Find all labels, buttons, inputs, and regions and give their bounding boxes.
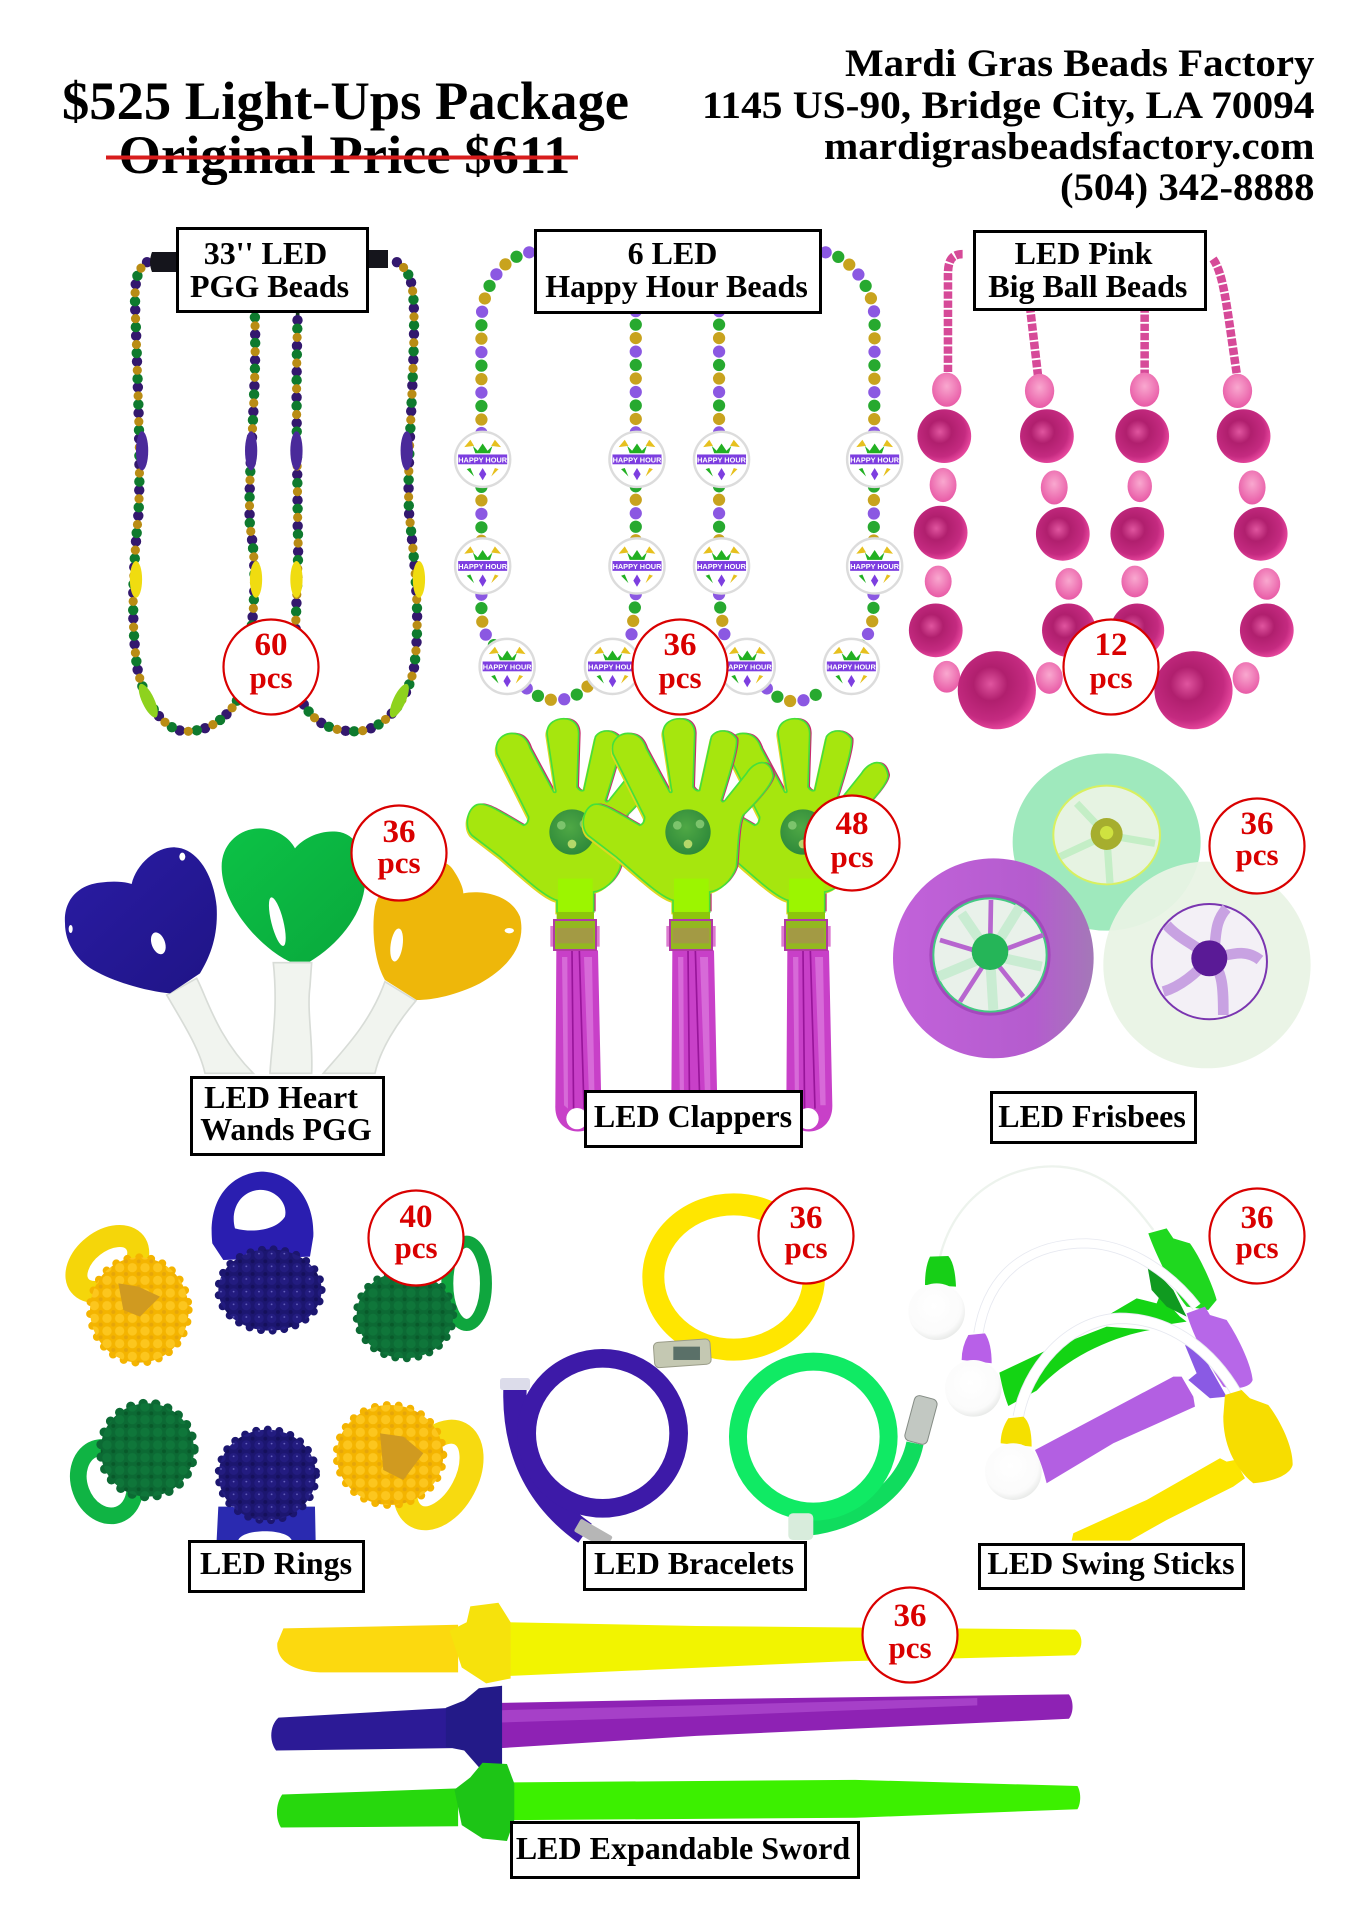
heart: purple — [65, 847, 217, 993]
swing stick: green — [908, 1166, 1217, 1406]
bracelets — [500, 1204, 938, 1549]
panel: LED clappers — [466, 718, 900, 1146]
medallions: Happy Hour: HAPPY HOUR — [827, 662, 876, 671]
sword: green — [277, 1763, 1080, 1841]
bracelet: green — [738, 1362, 938, 1540]
swing stick: yellow — [985, 1318, 1293, 1541]
rings — [66, 1172, 486, 1540]
company contact block: mardigrasbeadsfactory.com — [824, 125, 1314, 168]
badge: 36 pcs: 36 — [664, 627, 696, 663]
panel: 6 LED Happy Hour beads — [455, 230, 902, 714]
badge: 36 pcs: 36 — [382, 814, 416, 850]
title block: Original Price $611 — [118, 125, 570, 185]
badge: 48 pcs: 48 — [836, 806, 868, 842]
frisbee: purple — [893, 858, 1094, 1058]
ring: purple bottom — [217, 1430, 316, 1540]
badge: 36 pcs — [1210, 798, 1304, 894]
sword: yellow — [277, 1603, 1081, 1683]
clasp — [150, 250, 388, 272]
badge: 36 pcs: pcs — [377, 845, 421, 880]
badge: 36 pcs: pcs — [1235, 1230, 1279, 1265]
medallions: Happy Hour: HAPPY HOUR — [850, 562, 900, 571]
label: Wands PGG — [200, 1111, 372, 1147]
company contact block: (504) 342-8888 — [1060, 166, 1314, 209]
label: LED Clappers — [594, 1098, 792, 1134]
label — [974, 232, 1206, 310]
ring: yellow bottom — [337, 1405, 485, 1529]
necklace: pink big balls — [909, 254, 1294, 729]
panel: LED Pink Big Ball beads — [909, 232, 1294, 729]
label — [512, 1822, 858, 1878]
label — [192, 1078, 384, 1154]
label: PGG Beads — [190, 268, 349, 304]
panel: LED expandable sword — [271, 1588, 1081, 1878]
badge: 36 pcs — [1210, 1188, 1304, 1284]
title block — [62, 71, 629, 185]
medallions: Happy Hour: HAPPY HOUR — [483, 662, 532, 671]
ring: green top — [357, 1242, 486, 1358]
medallions: Happy Hour: HAPPY HOUR — [850, 455, 900, 464]
swing stick: purple — [945, 1243, 1253, 1483]
panel: LED rings — [66, 1172, 486, 1592]
label: 33'' LED — [204, 235, 327, 271]
badge: 60 pcs — [224, 620, 318, 714]
wand stems — [167, 963, 416, 1073]
heart: gold — [373, 862, 521, 1000]
label: 6 LED — [628, 235, 717, 271]
badge: 60 pcs: pcs — [249, 660, 293, 695]
medallions: Happy Hour: HAPPY HOUR — [613, 562, 662, 571]
label: LED Bracelets — [594, 1545, 794, 1581]
badge: 36 pcs — [352, 806, 446, 900]
panel: LED swing sticks — [908, 1166, 1304, 1588]
badge: 40 pcs: pcs — [394, 1230, 438, 1265]
bead accents — [130, 431, 425, 720]
label: LED Expandable Sword — [516, 1830, 850, 1866]
badge: 36 pcs: pcs — [658, 660, 702, 695]
medallions: Happy Hour: HAPPY HOUR — [697, 562, 747, 571]
hearts and stems — [65, 828, 521, 1073]
badge: 36 pcs: pcs — [888, 1630, 932, 1665]
label: LED Pink — [1015, 235, 1153, 271]
badge: 36 pcs — [758, 1188, 854, 1284]
label: LED Frisbees — [998, 1098, 1186, 1134]
ring: green bottom — [69, 1403, 194, 1524]
frisbee: mint — [1013, 753, 1201, 931]
medallions: Happy Hour: HAPPY HOUR — [458, 562, 508, 571]
badge: 36 pcs: pcs — [1235, 837, 1279, 872]
panel: LED heart wands — [65, 806, 521, 1154]
badge: 40 pcs — [368, 1190, 464, 1286]
badge: 36 pcs: pcs — [784, 1230, 828, 1265]
badge: 48 pcs — [804, 796, 900, 890]
badge: 12 pcs — [1064, 620, 1158, 714]
medallions: Happy Hour: HAPPY HOUR — [723, 662, 772, 671]
bracelet: yellow — [653, 1204, 814, 1368]
label: Big Ball Beads — [988, 268, 1187, 304]
badge: 36 pcs: 36 — [790, 1200, 822, 1236]
label — [586, 1092, 802, 1146]
badge: 36 pcs: 36 — [1240, 1200, 1274, 1236]
company contact block — [702, 42, 1315, 209]
label — [190, 1542, 364, 1592]
badge: 36 pcs — [862, 1588, 958, 1682]
panel: 33 inch LED PGG beads — [130, 228, 425, 731]
badge: 60 pcs: 60 — [254, 627, 288, 663]
medallions: Happy Hour: HAPPY HOUR — [613, 455, 662, 464]
label: Happy Hour Beads — [545, 268, 808, 304]
label: LED Heart — [204, 1079, 358, 1115]
panel: LED frisbees — [893, 753, 1311, 1142]
swing sticks — [908, 1166, 1293, 1541]
company contact block: Mardi Gras Beads Factory — [845, 42, 1315, 85]
badge: 40 pcs: 40 — [400, 1199, 432, 1235]
title block: $525 Light-Ups Package — [62, 71, 629, 131]
frisbees — [893, 753, 1311, 1068]
label — [992, 1092, 1196, 1142]
bracelet: purple — [500, 1358, 679, 1549]
label — [536, 230, 820, 312]
label — [584, 1542, 806, 1590]
badge: 36 pcs: 36 — [894, 1598, 926, 1634]
badge: 36 pcs — [632, 620, 728, 714]
ring: yellow top — [66, 1225, 189, 1363]
necklace: PGG beads — [133, 262, 417, 731]
badge: 36 pcs: 36 — [1240, 806, 1274, 842]
badge: 12 pcs: 12 — [1094, 627, 1128, 663]
sword: purple — [271, 1686, 1073, 1771]
heart: green — [222, 828, 365, 962]
necklace: Happy Hour beads — [481, 252, 875, 701]
clappers — [466, 718, 890, 1132]
medallions: Happy Hour — [455, 432, 902, 694]
heart highlights — [69, 853, 514, 962]
panel: LED bracelets — [500, 1188, 938, 1590]
swords — [271, 1603, 1081, 1841]
medallions: Happy Hour: HAPPY HOUR — [588, 662, 638, 671]
badge: 12 pcs: pcs — [1089, 660, 1133, 695]
label: LED Rings — [200, 1545, 352, 1581]
frisbee: cream — [1103, 862, 1311, 1068]
label — [178, 228, 368, 312]
ring: purple top — [212, 1172, 322, 1331]
badge: 48 pcs: pcs — [830, 839, 874, 874]
label: LED Swing Sticks — [987, 1545, 1235, 1581]
company contact block: 1145 US-90, Bridge City, LA 70094 — [702, 84, 1314, 127]
medallions: Happy Hour: HAPPY HOUR — [458, 455, 508, 464]
medallions: Happy Hour: HAPPY HOUR — [697, 455, 747, 464]
